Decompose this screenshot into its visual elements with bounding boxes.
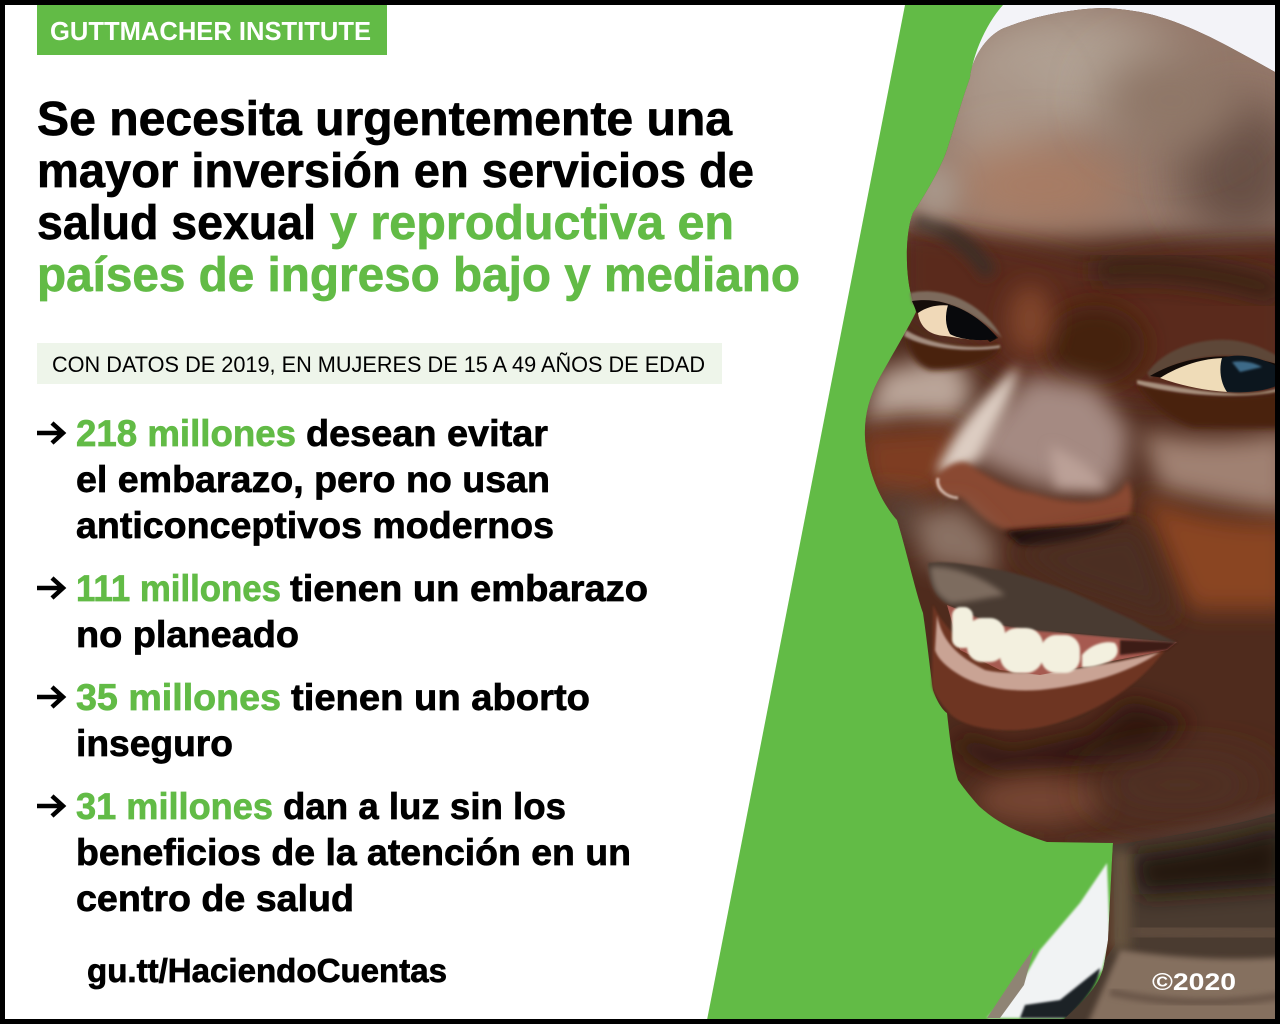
copyright: ©2020 <box>1152 969 1236 996</box>
statistic: 35 millones: 35 millones <box>76 677 281 718</box>
source link: gu.tt/HaciendoCuentas <box>87 952 447 989</box>
statistic: 111 millones: 111 millones <box>76 568 281 609</box>
statistic: 218 millones: el embarazo, pero no usan <box>76 459 550 500</box>
nose <box>960 375 1130 490</box>
right cheek <box>1140 430 1280 515</box>
statistic: 31 millones <box>37 786 631 919</box>
mouth interior <box>947 605 1177 675</box>
right eye <box>1137 340 1280 428</box>
statistic: 35 millones <box>37 677 590 764</box>
statistic: 31 millones: 31 millones <box>76 786 273 827</box>
title: y reproductiva en <box>330 197 734 250</box>
statistic: 35 millones: inseguro <box>76 723 233 764</box>
arrow <box>37 578 63 598</box>
left cheek <box>862 355 975 425</box>
statistic: 31 millones: dan a luz sin los <box>283 786 566 827</box>
publisher tag: GUTTMACHER INSTITUTE <box>50 16 371 46</box>
data note <box>37 343 722 384</box>
white headscarf <box>970 5 1280 85</box>
forehead <box>908 8 1275 248</box>
neck <box>1060 810 1280 1024</box>
title: Se necesita urgentemente una <box>37 93 732 146</box>
green diagonal panel <box>707 5 1280 1020</box>
statistic: 31 millones: centro de salud <box>76 878 354 919</box>
brow band <box>900 228 1280 400</box>
statistic: 111 millones: tienen un embarazo <box>290 568 648 609</box>
statistic: 35 millones: tienen un aborto <box>291 677 590 718</box>
philtrum and upper lip zone <box>912 505 995 575</box>
data note: CON DATOS DE 2019, EN MUJERES DE 15 A 49 AÑOS DE EDAD <box>52 352 705 377</box>
nose bridge shadow <box>1045 305 1145 385</box>
arrow <box>37 796 63 816</box>
teeth <box>952 607 1118 673</box>
upper lip <box>928 562 1178 643</box>
statistic: 218 millones: 218 millones <box>76 413 296 454</box>
statistic: 218 millones <box>37 413 554 546</box>
jaw and chin <box>955 700 1190 772</box>
title: salud sexual <box>37 197 316 250</box>
title: países de ingreso bajo y mediano <box>37 249 800 302</box>
arrow <box>37 423 63 443</box>
statistic: 111 millones <box>37 568 648 655</box>
skin <box>858 0 1280 1024</box>
photo: smiling woman <box>858 0 1280 1024</box>
publisher tag <box>37 5 387 55</box>
title <box>37 93 800 302</box>
title: mayor inversión en servicios de <box>37 145 754 198</box>
statistic: 31 millones: beneficios de la atención en un <box>76 832 631 873</box>
arrow <box>37 687 63 707</box>
statistic: 218 millones: desean evitar <box>306 413 548 454</box>
statistic: 218 millones: anticonceptivos modernos <box>76 505 554 546</box>
white collar with dark strap <box>987 863 1110 1018</box>
statistic: 111 millones: no planeado <box>76 614 299 655</box>
mouth <box>928 562 1178 730</box>
lower lip <box>932 605 1165 730</box>
left eye <box>904 291 1002 370</box>
